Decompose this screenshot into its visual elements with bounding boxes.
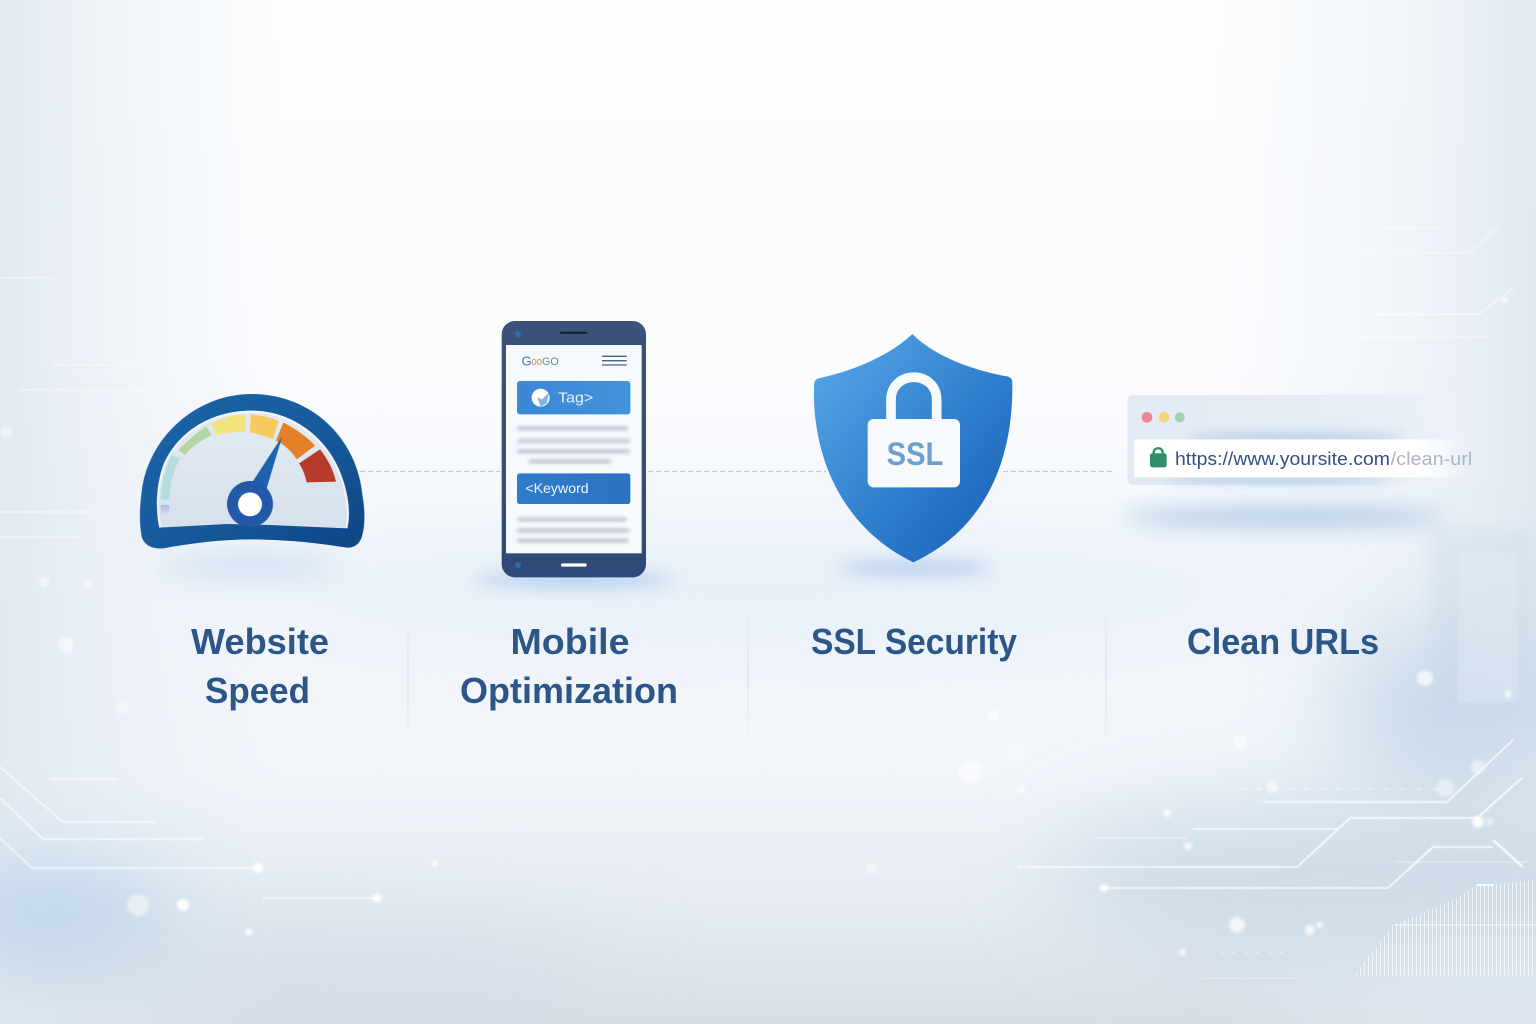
text placeholder lines (519, 428, 628, 461)
label: ssl security: SSL Security (811, 621, 1017, 662)
bar pattern chart (1353, 880, 1536, 976)
address bar glow (1163, 433, 1407, 484)
phone home bar (515, 562, 587, 568)
keyword button: <Keyword (525, 481, 589, 496)
gauge hub (227, 481, 273, 527)
label: mobile optimization: Mobile (510, 621, 630, 662)
browser shadow (1125, 506, 1445, 528)
shield (814, 334, 1012, 562)
circuit lines: upper edges (0, 225, 1513, 537)
icon: mobile phone (502, 321, 646, 577)
label: website speed: Website (191, 621, 329, 662)
padlock shackle (891, 377, 937, 422)
label: website speed: Speed (205, 670, 310, 711)
phone speaker and camera (515, 331, 587, 337)
gauge face (157, 411, 349, 528)
icon shadows (160, 557, 993, 586)
keyword button (517, 473, 630, 504)
icon: speed gauge (140, 394, 364, 548)
label: mobile optimization (460, 621, 678, 711)
bokeh particles (0, 297, 1511, 956)
lower placeholder lines (519, 519, 627, 541)
padlock body (868, 419, 960, 487)
gauge needle (253, 436, 282, 488)
window control dots (1142, 412, 1185, 423)
label: clean urls: Clean URLs (1187, 621, 1379, 662)
hamburger menu (602, 356, 627, 365)
gauge rim (140, 394, 364, 548)
icon: browser address bar (1127, 395, 1510, 485)
gauge scale segments (157, 411, 349, 528)
logo text (522, 354, 559, 368)
address bar (1134, 439, 1468, 477)
logo text: GO (542, 356, 559, 368)
logo text: G (522, 354, 532, 368)
label: mobile optimization: Optimization (460, 670, 678, 711)
circuit lines: bottom left (0, 767, 377, 898)
label: website speed (191, 621, 329, 711)
ssl label: SSL (887, 436, 943, 472)
column dividers (408, 612, 1106, 736)
logo text: oo (531, 356, 542, 368)
circuit lines: bottom right (1017, 740, 1530, 978)
phone screen (506, 345, 642, 553)
tag button (517, 381, 630, 414)
url text: https://www.yoursite.com (1175, 448, 1390, 469)
url text: /clean-url (1391, 448, 1472, 469)
icon: ssl shield (814, 334, 1012, 562)
connector dashes (360, 470, 1115, 472)
url text (1175, 448, 1472, 469)
phone body (502, 321, 646, 577)
tag button: Tag> (558, 391, 593, 407)
green lock (1150, 448, 1167, 467)
browser window (1127, 395, 1510, 485)
